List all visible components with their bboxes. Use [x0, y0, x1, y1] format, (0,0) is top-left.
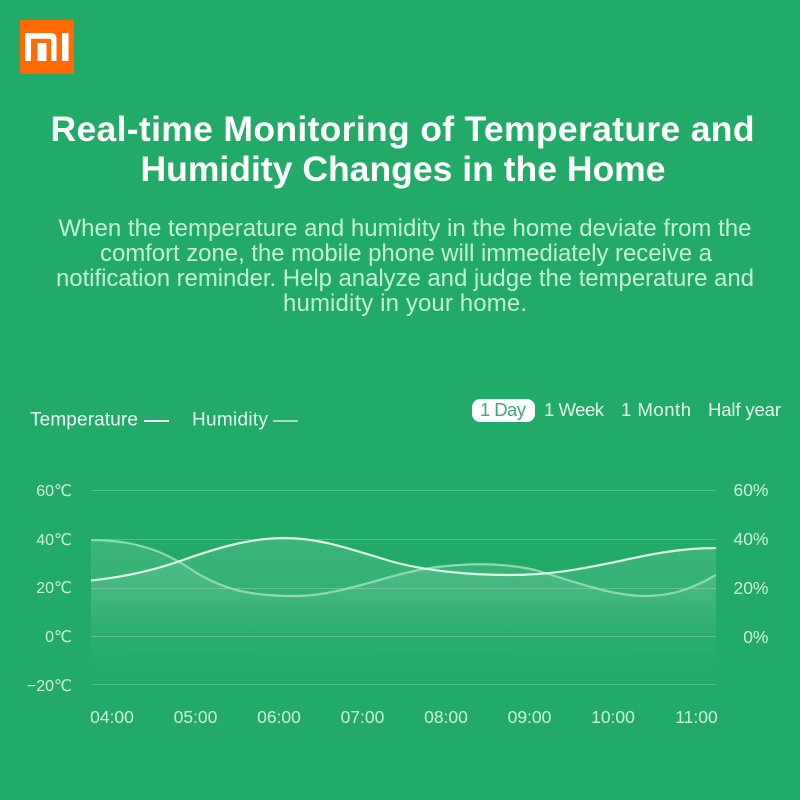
temperature line — [91, 538, 716, 580]
legend: humidity: Humidity — [192, 410, 268, 430]
legend — [30, 410, 298, 430]
left axis labels: 20℃ — [36, 580, 72, 597]
tab: 1 Week: 1 Week — [544, 399, 605, 420]
area under humidity — [91, 540, 716, 670]
time axis labels — [90, 707, 718, 727]
right axis labels: 0% — [743, 627, 768, 647]
description text: humidity in your home. — [283, 290, 527, 317]
left axis labels: 60℃ — [36, 483, 72, 500]
title: Humidity Changes in the Home — [140, 149, 666, 189]
left axis labels: 0℃ — [45, 629, 72, 646]
tab: 1 Month: 1 Month — [621, 399, 691, 420]
tab: 1 Day selected — [472, 399, 535, 422]
left axis labels: 40℃ — [36, 532, 72, 549]
line chart — [91, 490, 716, 684]
description text: When the temperature and humidity in the home deviate from the — [58, 215, 752, 242]
tab: 1 Day selected: 1 Day — [480, 399, 527, 420]
tab: Half year: Half year — [708, 399, 781, 420]
time axis labels: 10:00 — [591, 707, 635, 727]
time axis labels: 07:00 — [341, 707, 385, 727]
time axis labels: 05:00 — [174, 707, 218, 727]
right axis labels: 40% — [733, 529, 768, 549]
time axis labels: 11:00 — [675, 707, 718, 727]
title: Real-time Monitoring of Temperature and — [50, 109, 754, 149]
time axis labels: 06:00 — [257, 707, 301, 727]
right axis labels: 60% — [733, 480, 768, 500]
time range tabs — [472, 399, 781, 422]
description text — [56, 215, 754, 317]
description text: comfort zone, the mobile phone will immediately receive a — [100, 240, 713, 267]
time axis labels: 04:00 — [90, 707, 134, 727]
right axis labels: 20% — [733, 578, 768, 598]
area under temperature — [91, 538, 716, 670]
grid lines — [91, 490, 716, 684]
time axis labels: 08:00 — [424, 707, 468, 727]
icon: Mi logo — [20, 20, 74, 74]
legend: temperature: Temperature — [30, 410, 138, 430]
time axis labels: 09:00 — [508, 707, 552, 727]
right axis labels — [733, 480, 768, 647]
title — [50, 109, 754, 189]
left axis labels: −20℃ — [27, 678, 72, 695]
humidity line — [91, 540, 716, 596]
left axis labels — [27, 483, 72, 695]
description text: notification reminder. Help analyze and judge the temperature and — [56, 265, 754, 292]
